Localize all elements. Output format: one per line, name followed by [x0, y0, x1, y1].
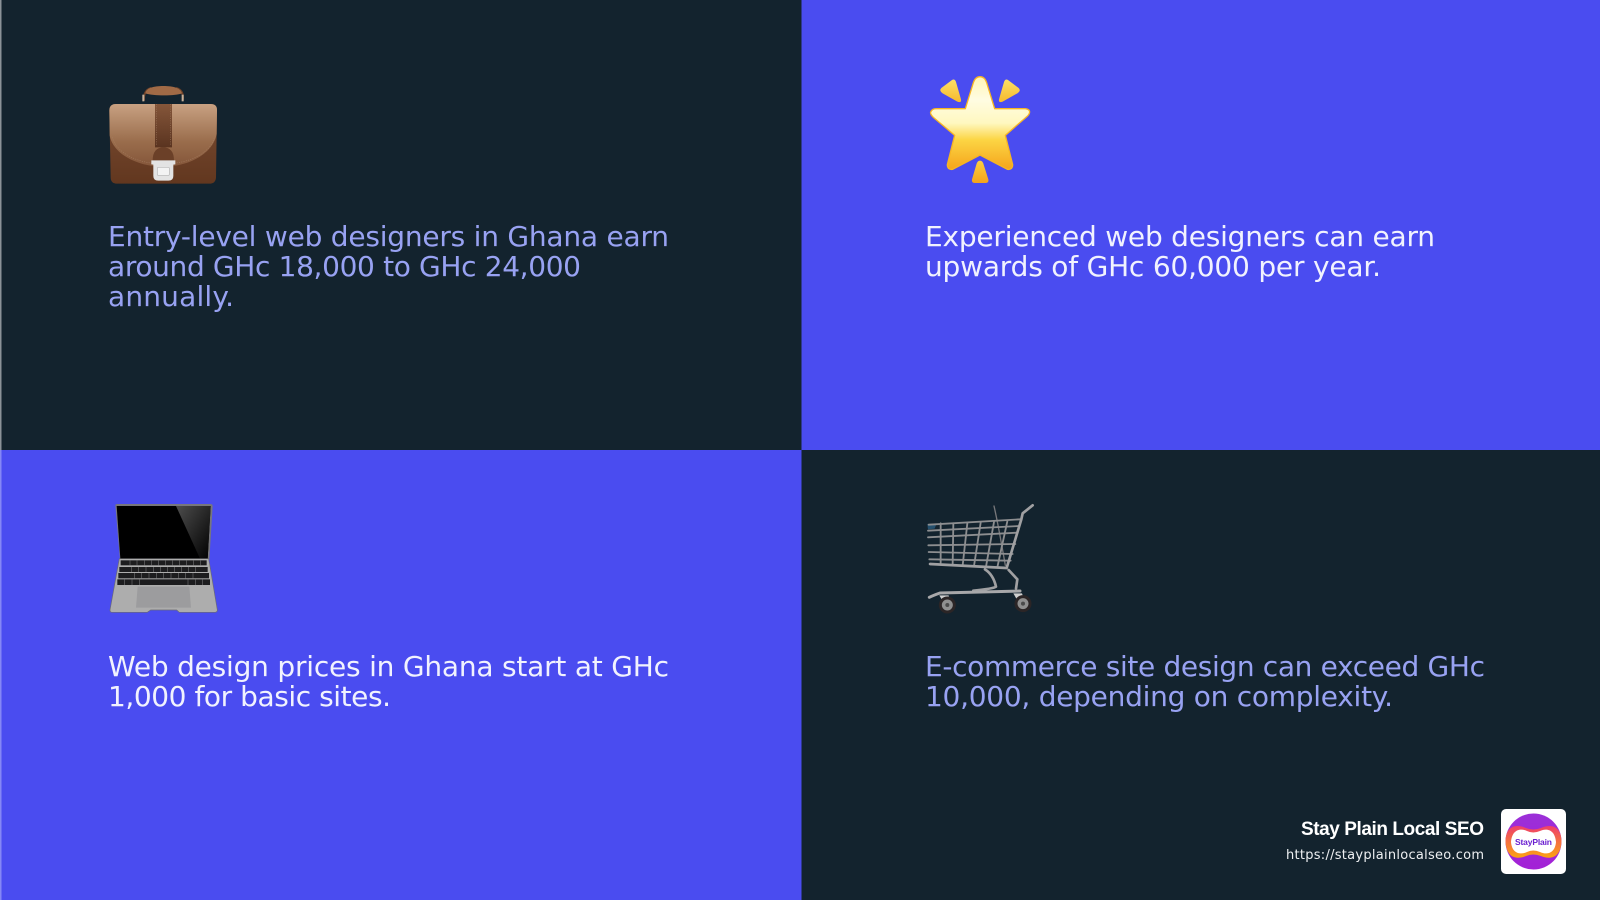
text: e-commerce prices: E-commerce site design can exceed GHc — [925, 650, 1485, 683]
text: experienced earnings: Experienced web designers can earn — [925, 220, 1435, 253]
text: basic site prices — [108, 650, 669, 713]
text: entry-level earnings — [108, 220, 669, 313]
logo — [1501, 809, 1566, 874]
text: experienced earnings: upwards of GHc 60,000 per year. — [925, 250, 1381, 283]
panel: experienced earnings — [802, 0, 1600, 450]
text: experienced earnings — [925, 220, 1435, 283]
footer: brand — [1286, 809, 1566, 874]
brand name: Stay Plain Local SEO — [1301, 819, 1484, 840]
icon: laptop — [110, 504, 217, 612]
left edge strip — [0, 0, 2, 450]
text: entry-level earnings: around GHc 18,000 to GHc 24,000 — [108, 250, 581, 283]
text: basic site prices: Web design prices in Ghana start at GHc — [108, 650, 669, 683]
text: entry-level earnings: annually. — [108, 280, 234, 313]
icon: glowing star — [931, 77, 1030, 183]
brand url: https://stayplainlocalseo.com — [1286, 848, 1484, 863]
icon: briefcase — [109, 86, 217, 184]
text: entry-level earnings: Entry-level web designers in Ghana earn — [108, 220, 669, 253]
icon: shopping cart — [927, 505, 1033, 612]
panel: e-commerce prices — [802, 450, 1600, 900]
logo text: StayPlain — [1515, 837, 1552, 847]
text: basic site prices: 1,000 for basic sites. — [108, 680, 391, 713]
text: e-commerce prices: 10,000, depending on complexity. — [925, 680, 1393, 713]
panel: basic site prices — [0, 450, 802, 900]
panel: entry-level earnings — [0, 0, 802, 450]
text: e-commerce prices — [925, 650, 1485, 713]
